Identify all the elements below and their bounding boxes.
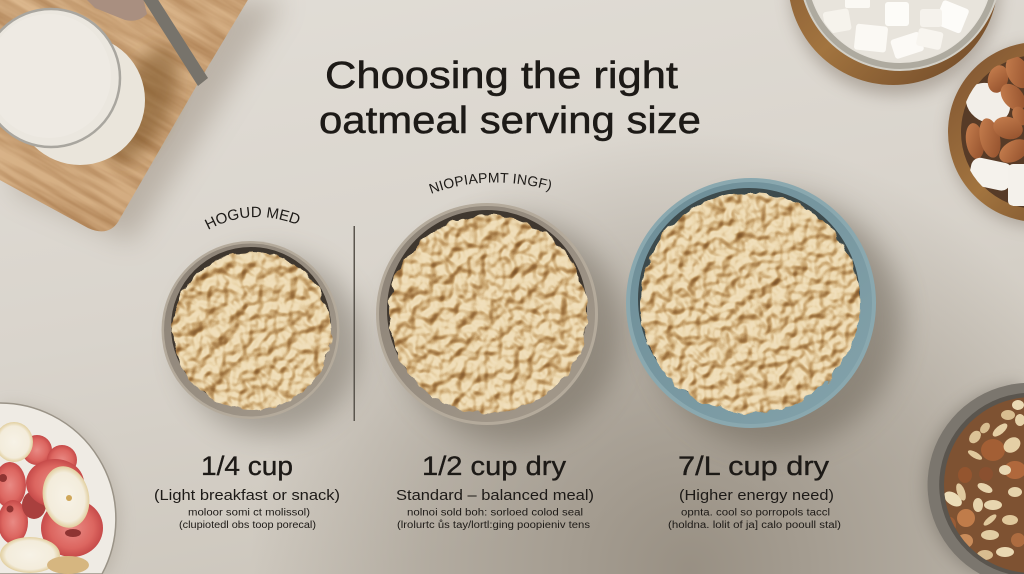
bowl shadow xyxy=(650,196,902,448)
medium bowl: 1/2 cup xyxy=(376,172,632,452)
title: oatmeal serving size xyxy=(319,100,701,142)
board xyxy=(0,0,249,231)
caption: 7/L cup dry: (holdna. lolit of ja] calo pooull stal) xyxy=(668,520,841,531)
caption: 1/4 cup: 1/4 cup xyxy=(201,451,293,481)
caption: 1/4 cup xyxy=(154,451,340,531)
caption: 1/2 cup dry: 1/2 cup dry xyxy=(422,451,567,481)
large bowl: 7/L cup xyxy=(626,178,902,448)
oatmeal xyxy=(640,193,860,413)
bowl rim xyxy=(626,178,876,428)
bowl shadow xyxy=(180,254,360,434)
title xyxy=(319,55,701,142)
knife xyxy=(85,0,208,86)
wooden bowl of almonds and marshmallows xyxy=(948,42,1024,227)
curved label: HOGUD MED xyxy=(204,206,300,230)
bowl rim xyxy=(376,203,598,425)
bowl rim xyxy=(162,241,340,419)
caption: 1/2 cup dry: nolnoi sold boh: sorloed colod seal xyxy=(407,508,583,518)
caption: 1/4 cup: moloor somi ct molissol) xyxy=(188,508,310,518)
divider line xyxy=(354,226,355,421)
curved label: NIOPIAPMT INGF) xyxy=(429,172,551,194)
caption: 7/L cup dry: opnta. cool so porropols taccl xyxy=(681,508,830,518)
caption: 7/L cup dry: 7/L cup dry xyxy=(678,451,830,481)
caption: 7/L cup dry xyxy=(668,451,841,531)
cutting board with milk glass xyxy=(0,0,286,247)
bowl of mixed nuts xyxy=(925,383,1024,574)
caption: 1/4 cup: (clupiotedl obs toop porecal) xyxy=(179,520,316,531)
oatmeal xyxy=(389,215,587,413)
caption: 1/2 cup dry xyxy=(396,451,594,531)
caption: 1/2 cup dry: Standard – balanced meal) xyxy=(396,487,594,504)
small bowl: 1/4 cup xyxy=(162,206,372,448)
caption: 1/4 cup: (Light breakfast or snack) xyxy=(154,487,340,504)
caption: 7/L cup dry: (Higher energy need) xyxy=(679,487,834,504)
glass bowl of white cubes on wood xyxy=(788,0,1000,95)
milk glass xyxy=(0,9,145,165)
caption: 1/2 cup dry: (lrolurtc ůs tay/lortl:ging poopieniv tens xyxy=(397,519,590,531)
title: Choosing the right xyxy=(325,55,678,97)
fruit slices xyxy=(0,422,103,574)
oatmeal xyxy=(173,252,331,410)
bowl shadow xyxy=(398,218,622,442)
plate of sliced fruit xyxy=(0,403,120,574)
